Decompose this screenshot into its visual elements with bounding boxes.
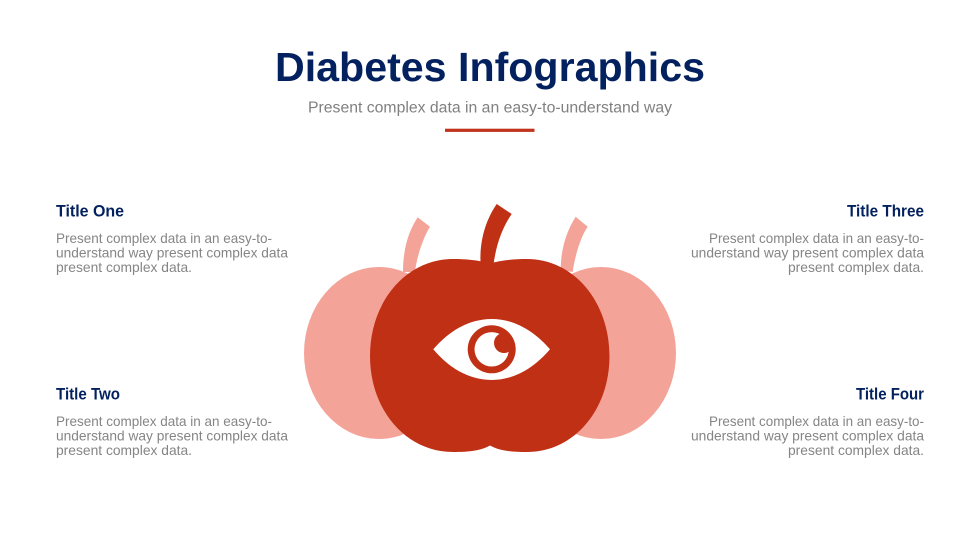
title: Diabetes Infographics — [275, 44, 705, 90]
text block: title one: Title One — [56, 203, 124, 221]
text block: title one: understand way present complex data — [56, 246, 288, 261]
text block: title one: present complex data. — [56, 260, 192, 275]
text block: title four: understand way present complex data — [691, 429, 924, 444]
text block: title two — [56, 386, 288, 458]
text block: title four: Title Four — [856, 386, 925, 404]
icon: front apple — [370, 204, 610, 452]
text block: title four: present complex data. — [788, 443, 924, 458]
text block: title three: present complex data. — [788, 260, 924, 275]
text block: title three: Title Three — [847, 203, 924, 221]
text block: title four: Present complex data in an easy-to- — [709, 414, 924, 429]
text block: title three: Present complex data in an easy-to- — [709, 231, 924, 246]
icon: back right apple — [526, 217, 676, 439]
subtitle: Present complex data in an easy-to-understand way — [308, 99, 672, 116]
text block: title two: Present complex data in an easy-to- — [56, 414, 272, 429]
text block: title four — [691, 386, 925, 458]
text block: title one — [56, 203, 288, 275]
text block: title two: understand way present complex data — [56, 429, 288, 444]
icon: eye — [433, 319, 550, 380]
text block: title two: Title Two — [56, 386, 120, 404]
text block: title two: present complex data. — [56, 443, 192, 458]
title underline — [445, 129, 534, 132]
text block: title three: understand way present complex data — [691, 246, 924, 261]
text block: title three — [691, 203, 924, 275]
icon: back left apple — [304, 217, 454, 439]
text block: title one: Present complex data in an easy-to- — [56, 231, 272, 246]
